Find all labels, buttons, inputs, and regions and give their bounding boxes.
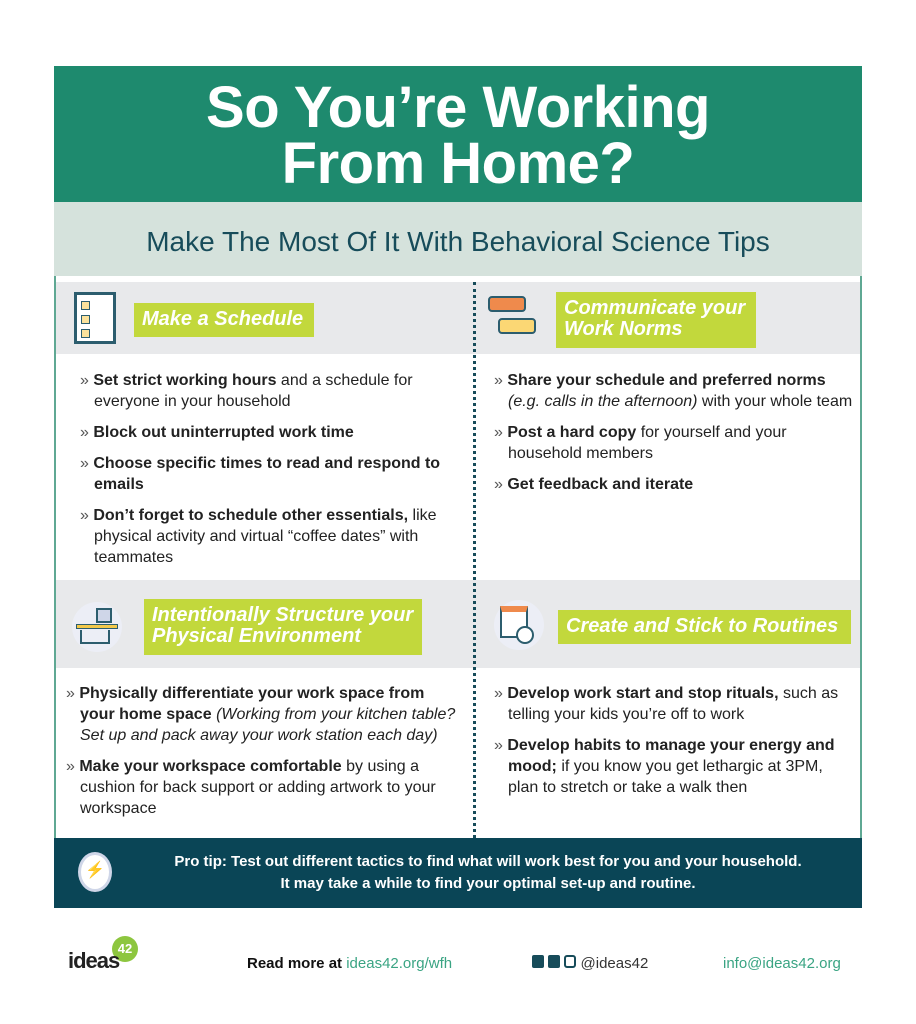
heading: make a schedule	[134, 303, 314, 337]
read more: Read more at ideas42.org/wfh	[247, 955, 452, 972]
header band bottom	[56, 580, 860, 668]
heading: communicate	[556, 292, 756, 348]
heading: communicate: Communicate your Work Norms	[564, 297, 745, 340]
list: schedule: Set strict working hours and a schedule for everyone in your household	[93, 372, 413, 410]
list: schedule: Block out uninterrupted work time	[93, 424, 354, 441]
heading: physical environment: Intentionally Structure your Physical Environment	[152, 604, 413, 647]
title	[54, 66, 862, 202]
icon: desk	[72, 602, 122, 652]
title: From Home?	[282, 131, 634, 196]
pro tip band: It may take a while to find your optimal set-up and routine.	[280, 875, 696, 892]
logo: ideas42	[68, 936, 138, 973]
list: schedule: Don’t forget to schedule other essentials, like physical activity and virtual “coffee dates” with teammates	[93, 507, 437, 566]
title: So You’re Working	[206, 75, 710, 140]
list: communicate: Get feedback and iterate	[507, 476, 693, 493]
list: routines: Develop habits to manage your energy and mood; if you know you get lethargic at 3PM, plan to stretch or take a walk then	[507, 737, 835, 796]
list: routines: Develop work start and stop rituals, such as telling your kids you’re off to work	[507, 685, 838, 723]
pro tip band	[54, 838, 862, 908]
frame	[54, 66, 862, 908]
logo: ideas42: 42	[118, 941, 132, 956]
header band top	[56, 282, 860, 354]
pro tip band: Pro tip: Test out different tactics to find what will work best for you and your household.	[174, 853, 802, 870]
email: info@ideas42.org	[723, 955, 841, 972]
icon: lightbulb: ⚡	[85, 862, 105, 879]
dotted divider	[473, 282, 476, 838]
list: communicate: Post a hard copy for yourself and your household members	[507, 424, 787, 462]
icon: chat	[488, 296, 536, 334]
icon: calendar	[494, 600, 544, 650]
social	[532, 955, 648, 972]
subtitle: Make The Most Of It With Behavioral Science Tips	[146, 226, 770, 257]
list: environment	[66, 685, 456, 817]
list: schedule	[80, 372, 440, 566]
icon: lightbulb	[78, 852, 112, 892]
logo: ideas42: ideas	[68, 948, 119, 973]
list: schedule: Choose specific times to read and respond to emails	[93, 455, 440, 493]
list: environment: Make your workspace comfortable by using a cushion for back support or adding artwork to your workspace	[79, 758, 436, 817]
list: environment: Physically differentiate your work space from your home space (Working from your kitchen table? Set up and pack away your work station each day)	[79, 685, 455, 744]
list: routines	[494, 685, 838, 796]
heading: routines	[558, 610, 851, 644]
list: communicate: Share your schedule and preferred norms (e.g. calls in the afternoon) with your whole team	[507, 372, 852, 410]
social: @ideas42	[580, 955, 648, 972]
heading: make a schedule: Make a Schedule	[142, 308, 303, 330]
icon: checklist	[74, 292, 116, 344]
list: communicate	[494, 372, 852, 493]
heading: routines: Create and Stick to Routines	[566, 615, 838, 637]
subtitle	[54, 202, 862, 276]
